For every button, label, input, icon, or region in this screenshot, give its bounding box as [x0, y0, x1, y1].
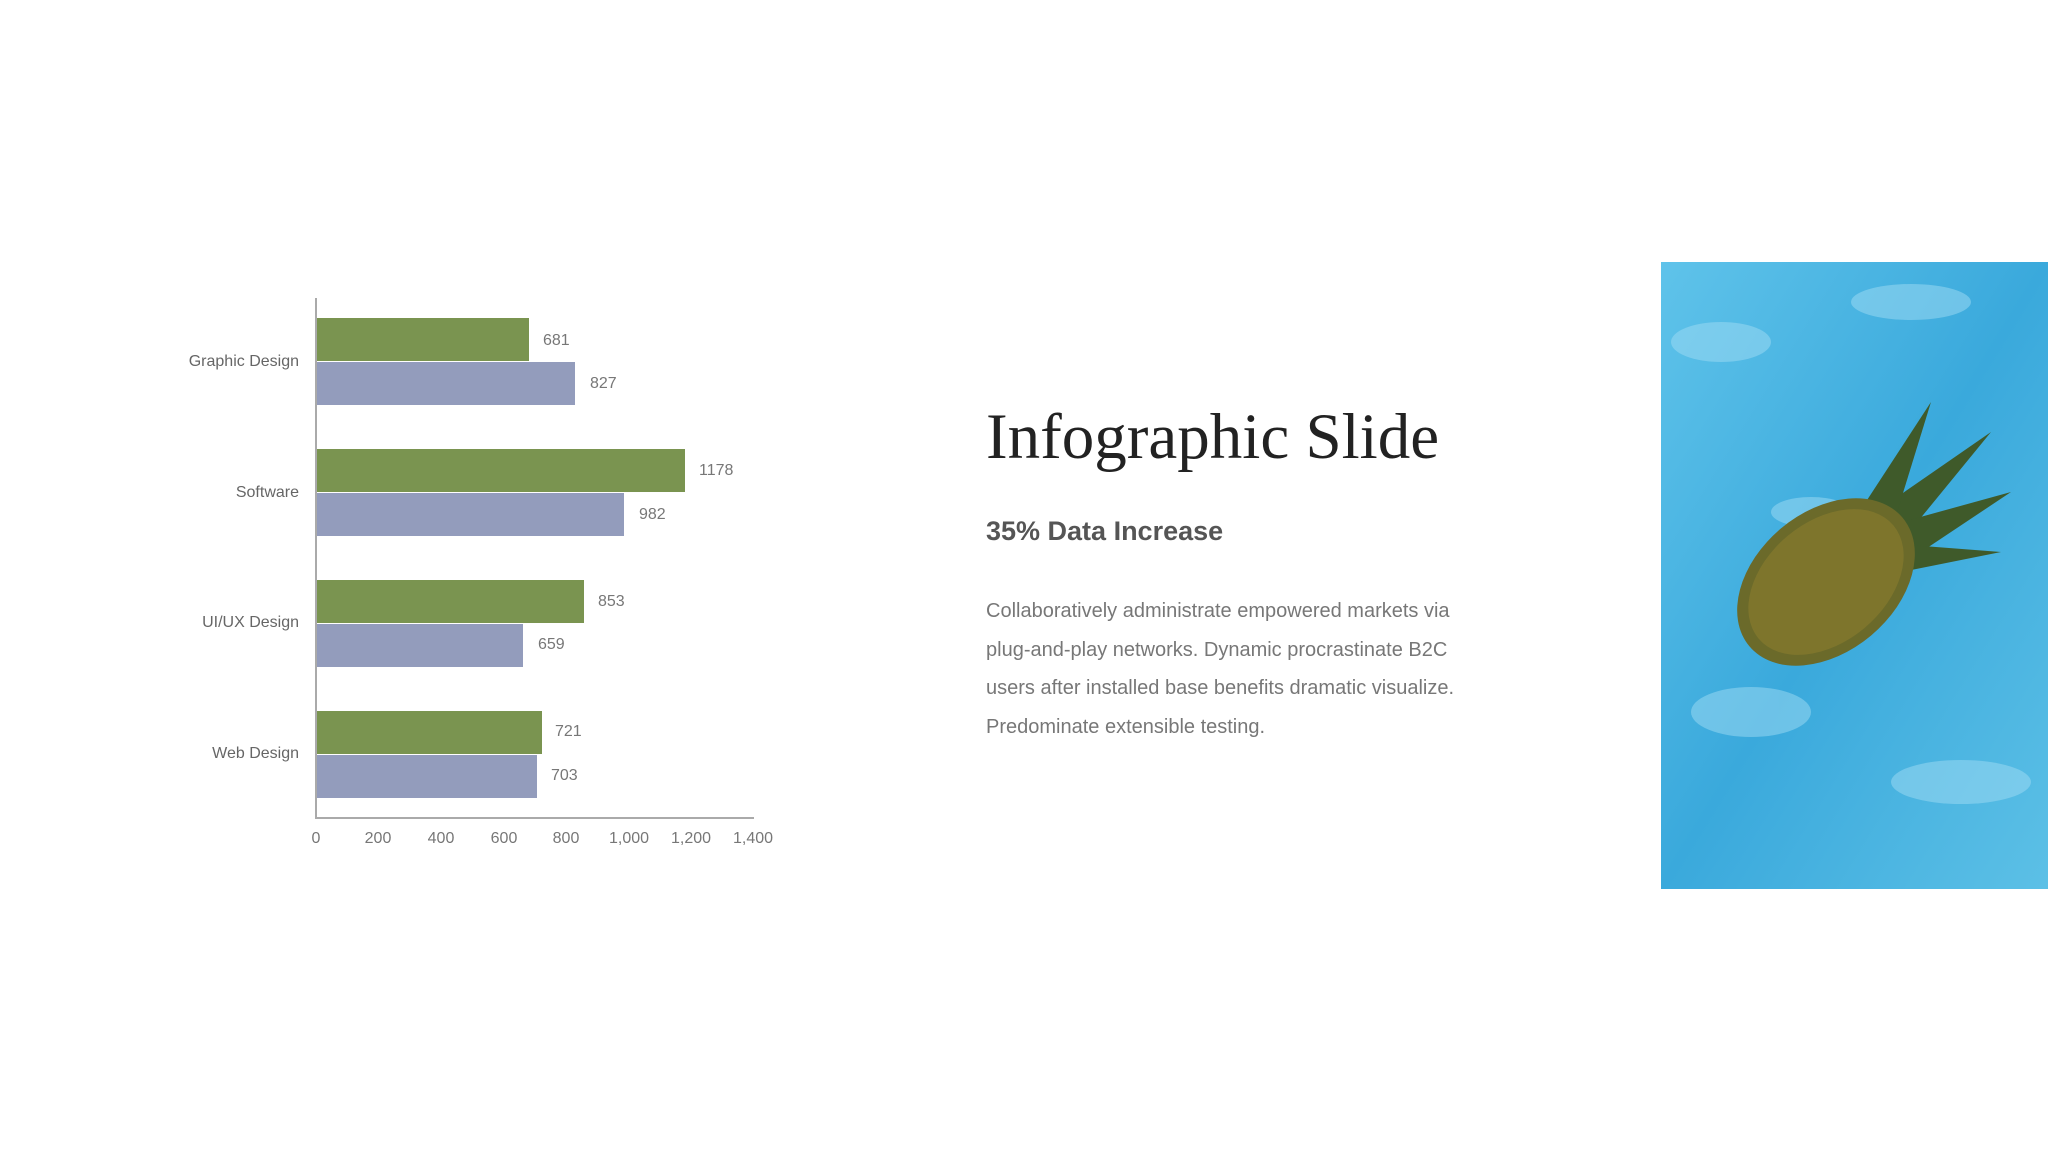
bar chart: Software [236, 484, 299, 501]
bars: Graphic Design [317, 318, 529, 361]
subtitle: 35% Data Increase [986, 516, 1223, 546]
pineapple leaves [1856, 402, 2011, 572]
bar chart: 400 [428, 830, 454, 847]
bar chart: 853 [598, 593, 625, 610]
pineapple body [1704, 464, 1948, 700]
bar chart: 200 [365, 830, 391, 847]
bar chart: 827 [590, 375, 617, 392]
bar chart: 659 [538, 636, 565, 653]
bar chart: 600 [491, 830, 517, 847]
axis tick labels: 0 [312, 830, 320, 847]
bar chart: 1,000 [609, 830, 649, 847]
axis lines [315, 298, 317, 819]
bar chart: 703 [551, 767, 578, 784]
image: pineapple in pool [1661, 262, 2048, 889]
body text: Collaboratively administrate empowered markets via plug-and-play networks. Dynamic procrastinate B2C users after installed base benefits dramatic visualize. Predominate extensible testing. [986, 600, 1454, 738]
bar chart: 800 [553, 830, 579, 847]
category labels: Graphic Design [189, 353, 299, 370]
bars: UI/UX Design [317, 580, 584, 623]
bar chart: 1178 [699, 462, 733, 479]
value labels: 681 [543, 332, 570, 349]
bars: Web Design [317, 711, 542, 754]
bar chart: 721 [555, 723, 582, 740]
bar chart [189, 298, 773, 847]
bars: Software [317, 449, 685, 492]
bar chart: 1,200 [671, 830, 711, 847]
bar chart: UI/UX Design [202, 614, 299, 631]
title: Infographic Slide [986, 401, 1439, 473]
bar chart: 982 [639, 506, 666, 523]
bar chart: 1,400 [733, 830, 773, 847]
bar chart: Web Design [212, 745, 299, 762]
